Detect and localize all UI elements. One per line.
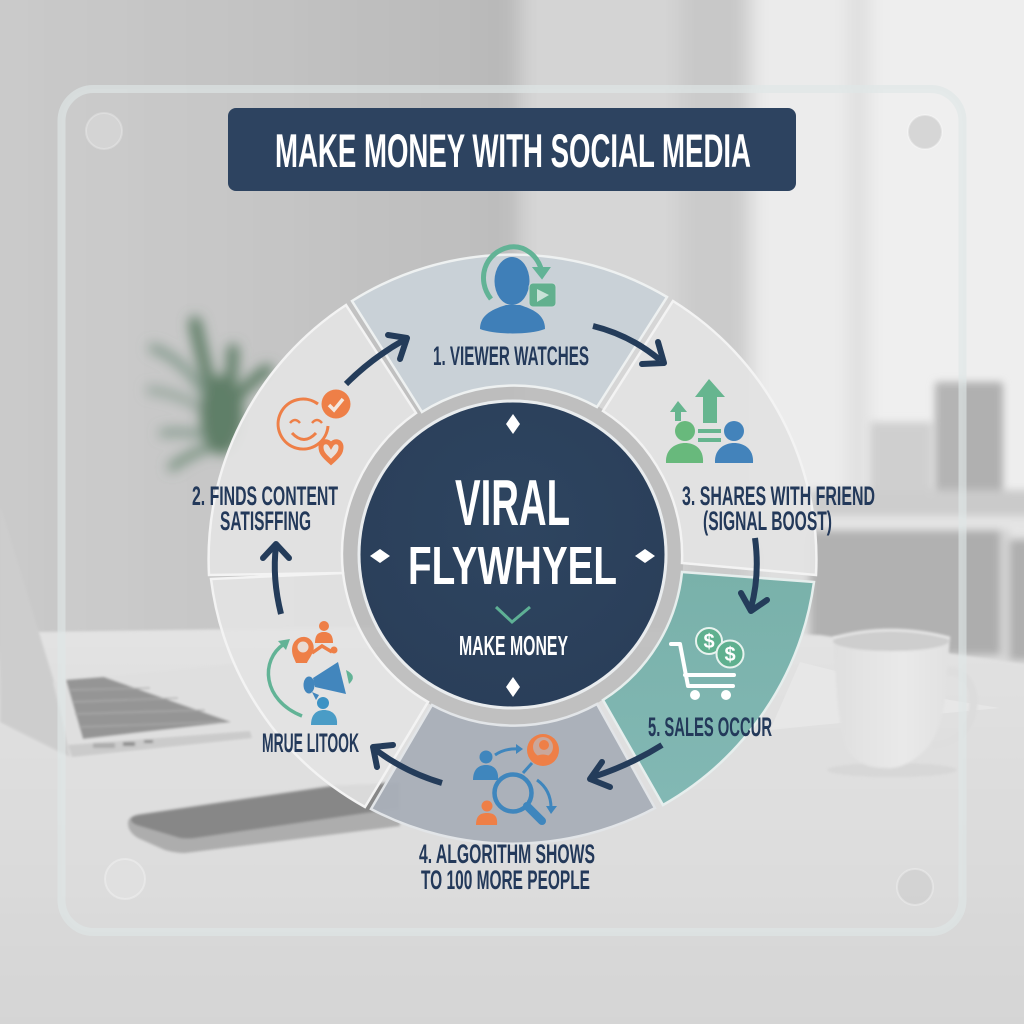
label: algorithm shows: TO 100 MORE PEOPLE bbox=[421, 865, 590, 895]
label: shares with friend bbox=[682, 481, 875, 536]
icon: cart and coins bbox=[671, 628, 744, 700]
table top bbox=[0, 625, 1024, 1024]
hub title: VIRAL bbox=[455, 466, 570, 539]
icon: cart and coins: $ bbox=[724, 644, 736, 666]
plant bbox=[150, 323, 267, 467]
segment 3: shares with friend bbox=[603, 301, 875, 575]
hub subtitle: MAKE MONEY bbox=[459, 630, 568, 661]
label: shares with friend: 3. SHARES WITH FRIEND bbox=[682, 481, 875, 511]
label: more lookup: MRUE LITOOK bbox=[262, 728, 359, 758]
icon: sharing people with arrows bbox=[666, 379, 753, 463]
phone bbox=[128, 782, 400, 853]
laptop bbox=[0, 505, 300, 757]
laptop plate under mug bbox=[770, 662, 1000, 730]
hub title: FLYWHYEL bbox=[408, 536, 617, 596]
label: finds content satisfying: 2. FINDS CONTENT bbox=[192, 481, 338, 511]
check mark bbox=[496, 607, 530, 622]
panel screw bottom left bbox=[105, 859, 145, 899]
diamond left bbox=[370, 549, 390, 563]
panel screw bottom right bbox=[897, 869, 933, 905]
segment 4: algorithm shows bbox=[371, 704, 655, 844]
glass panel bbox=[62, 89, 962, 932]
arrow: segment 1 to 3 bbox=[593, 326, 664, 364]
label: algorithm shows bbox=[419, 839, 595, 895]
diamond bottom bbox=[506, 677, 520, 697]
panel screw top right bbox=[908, 115, 942, 149]
label: finds content satisfying: SATISFFING bbox=[220, 506, 311, 536]
flywheel bbox=[192, 247, 875, 895]
icon: smile with check and heart bbox=[278, 390, 350, 462]
label: sales occur: 5. SALES OCCUR bbox=[648, 712, 772, 742]
icon: cart and coins: $ bbox=[703, 631, 715, 653]
label: finds content satisfying bbox=[192, 481, 338, 536]
segment 1: viewer watches bbox=[352, 247, 667, 412]
inner grey ring bbox=[350, 392, 676, 718]
title banner bbox=[228, 108, 796, 191]
label: shares with friend: (SIGNAL BOOST) bbox=[703, 506, 832, 536]
label: algorithm shows: 4. ALGORITHM SHOWS bbox=[419, 839, 595, 869]
arrow: segment 2 to 1 bbox=[346, 335, 407, 384]
arrow: segment 4 to 6 bbox=[373, 745, 442, 783]
icon: viewer with video bbox=[480, 247, 556, 334]
segment 6: more lookup bbox=[211, 573, 428, 807]
diamond right bbox=[635, 549, 655, 563]
mug bbox=[827, 629, 974, 777]
hub title bbox=[408, 466, 617, 596]
diamond top bbox=[506, 414, 520, 434]
arrow: segment 5 to 4 bbox=[590, 745, 662, 787]
panel screw top left bbox=[86, 113, 122, 149]
arrow: segment 3 to 5 bbox=[741, 538, 767, 611]
hub bbox=[358, 400, 668, 710]
label: viewer watches: 1. VIEWER WATCHES bbox=[433, 341, 589, 371]
icon: algorithm magnifier with people bbox=[473, 734, 559, 825]
icon: megaphone with people bbox=[268, 621, 353, 725]
segment 5: sales occur bbox=[603, 572, 814, 805]
segment 2: finds content satisfying bbox=[192, 305, 416, 575]
arrow: segment 6 to 2 bbox=[263, 544, 289, 614]
